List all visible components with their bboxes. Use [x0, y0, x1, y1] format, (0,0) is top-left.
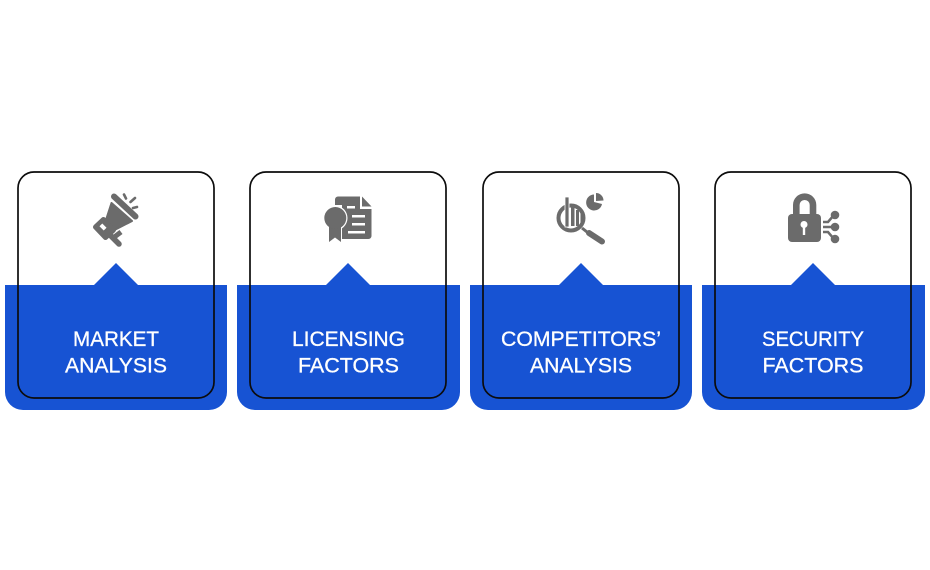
blue base [470, 263, 692, 410]
icon: magnifier with chart [558, 192, 605, 242]
card outline [715, 172, 911, 398]
blue base [702, 263, 925, 410]
panel: market analysis [5, 172, 227, 410]
panel: licensing factors [237, 172, 460, 410]
panel: competitors' analysis [470, 172, 692, 410]
label: security factors [762, 328, 864, 378]
icon: certificate document [322, 196, 372, 242]
label: market analysis [65, 328, 167, 378]
panel: security factors [702, 172, 925, 410]
card outline [483, 172, 679, 398]
card outline [250, 172, 446, 398]
card outline [18, 172, 214, 398]
label: licensing factors: FACTORS [298, 354, 399, 378]
blue base [237, 263, 460, 410]
label: market analysis: ANALYSIS [65, 354, 167, 378]
label: security factors: FACTORS [762, 354, 864, 378]
icon: padlock with network nodes [788, 197, 839, 243]
label: competitors' analysis [501, 328, 661, 378]
label: competitors' analysis: ANALYSIS [530, 354, 632, 378]
label: competitors' analysis: COMPETITORS’ [501, 328, 661, 351]
label: licensing factors: LICENSING [292, 328, 405, 351]
label: security factors: SECURITY [762, 328, 864, 351]
label: market analysis: MARKET [73, 328, 159, 351]
blue base [5, 263, 227, 410]
icon: megaphone [96, 194, 137, 244]
label: licensing factors [292, 328, 405, 378]
